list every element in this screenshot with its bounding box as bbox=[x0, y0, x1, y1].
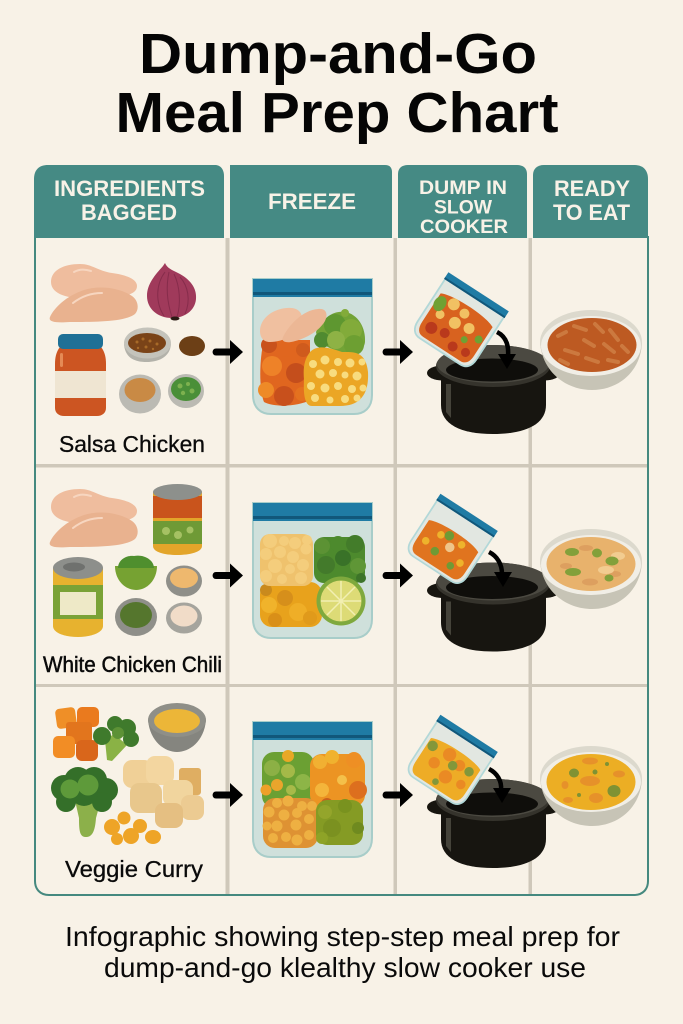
row 3 finished bowl bbox=[540, 746, 642, 826]
arrow: row 2 to freeze bbox=[213, 564, 243, 588]
row 3 dump step bbox=[404, 715, 560, 868]
bag contents: yellow corn bbox=[304, 347, 368, 406]
icon: can of white beans bbox=[53, 557, 103, 637]
icon: bowl of brown spice bbox=[124, 328, 171, 362]
icon: tilted bag bbox=[404, 715, 498, 809]
title: Meal Prep Chart bbox=[116, 81, 559, 145]
label: veggie curry: Veggie Curry bbox=[65, 856, 204, 882]
bag contents: squash bbox=[260, 582, 322, 627]
icon: bowl of curry sauce bbox=[148, 703, 206, 752]
arrow: row 2 to slow cooker bbox=[383, 564, 413, 588]
bag contents: orange salsa chunks bbox=[258, 337, 310, 406]
header: ready to eat bbox=[533, 165, 648, 238]
bag contents: sliced chicken bbox=[260, 308, 327, 342]
icon: chicken breasts bbox=[50, 264, 138, 322]
icon: bowl of cream bbox=[166, 602, 202, 634]
row 1 finished bowl bbox=[540, 310, 642, 390]
icon: bowl of green herbs bbox=[115, 598, 157, 636]
bag contents: chickpeas bbox=[262, 796, 318, 848]
icon: bowl of white beans bbox=[166, 566, 202, 596]
icon: green bowl of peppers bbox=[115, 556, 157, 590]
icon: carrot chunks bbox=[53, 707, 99, 761]
icon: slow cooker bbox=[427, 779, 560, 868]
bag contents: green vegetables bbox=[260, 750, 314, 808]
icon: slow cooker bbox=[427, 345, 560, 434]
icon: large broccoli bbox=[51, 767, 118, 837]
arrow: into cooker bbox=[497, 332, 516, 369]
icon: red onion bbox=[147, 263, 196, 320]
arrow: row 3 to slow cooker bbox=[383, 783, 413, 807]
bag contents: chickpeas bbox=[260, 534, 313, 586]
icon: tilted bag bbox=[410, 272, 509, 371]
row 2 finished bowl bbox=[540, 529, 642, 609]
bag contents: lime slice bbox=[316, 576, 366, 626]
icon: bowl of green herbs bbox=[168, 374, 204, 408]
icon: can of tomatoes and beans bbox=[153, 484, 202, 555]
caption: Infographic showing step-step meal prep for bbox=[65, 921, 620, 952]
header: ingredients bagged: BAGGED bbox=[81, 200, 177, 225]
arrow: row 1 to slow cooker bbox=[383, 340, 413, 364]
column and row dividers bbox=[36, 238, 647, 894]
label: white chicken chili: White Chicken Chili bbox=[43, 652, 222, 677]
arrow: into cooker bbox=[489, 552, 512, 587]
header: dump in slow cooker bbox=[398, 165, 527, 238]
curry soup bbox=[546, 754, 636, 810]
salsa chicken soup bbox=[548, 318, 636, 372]
icon: bowl of chili powder bbox=[119, 374, 161, 414]
icon: slow cooker bbox=[427, 562, 560, 652]
row 2 freezer bag bbox=[253, 503, 372, 638]
bag contents: orange vegetables bbox=[310, 750, 367, 810]
icon: salsa jar bbox=[55, 334, 106, 416]
arrow: into cooker bbox=[489, 769, 511, 803]
row 2 dump step bbox=[404, 494, 560, 652]
arrow: row 3 to freeze bbox=[213, 783, 243, 807]
caption: dump-and-go klealthy slow cooker use bbox=[104, 952, 586, 983]
header: dump in slow cooker: COOKER bbox=[420, 216, 508, 238]
arrow: row 1 to freeze bbox=[213, 340, 243, 364]
row 1 ingredients: salsa chicken bbox=[50, 263, 205, 457]
icon: small broccoli bbox=[93, 716, 139, 761]
bag contents: olive greens bbox=[316, 799, 364, 845]
header: ready to eat: READY bbox=[554, 176, 630, 201]
white chili soup bbox=[546, 537, 636, 591]
header: freeze: FREEZE bbox=[268, 189, 356, 214]
header: dump in slow cooker: DUMP IN bbox=[419, 177, 507, 199]
row 1 dump step bbox=[410, 272, 560, 434]
row 3 ingredients: veggie curry bbox=[51, 703, 206, 882]
header: freeze bbox=[230, 165, 392, 238]
header: dump in slow cooker: SLOW bbox=[434, 196, 493, 218]
bag contents: green peas bbox=[314, 309, 365, 355]
caption bbox=[65, 921, 620, 983]
table frame bbox=[35, 236, 648, 895]
icon: tilted bag bbox=[404, 494, 498, 588]
label: salsa chicken: Salsa Chicken bbox=[59, 431, 205, 457]
header: ingredients bagged: INGREDIENTS bbox=[54, 176, 205, 201]
bag contents: broccoli bbox=[314, 535, 366, 583]
header: ready to eat: TO EAT bbox=[553, 200, 631, 225]
icon: ground spice pile bbox=[179, 336, 205, 356]
icon: small orange pieces bbox=[104, 812, 161, 845]
row 3 freezer bag bbox=[253, 722, 372, 857]
header: ingredients bagged bbox=[34, 165, 224, 238]
title: Dump-and-Go bbox=[139, 22, 537, 86]
row 2 ingredients: white chicken chili bbox=[43, 484, 222, 677]
icon: chicken breasts bbox=[50, 489, 138, 547]
row 1 freezer bag bbox=[253, 279, 372, 414]
title bbox=[116, 22, 559, 145]
icon: potato chunks bbox=[123, 756, 204, 828]
